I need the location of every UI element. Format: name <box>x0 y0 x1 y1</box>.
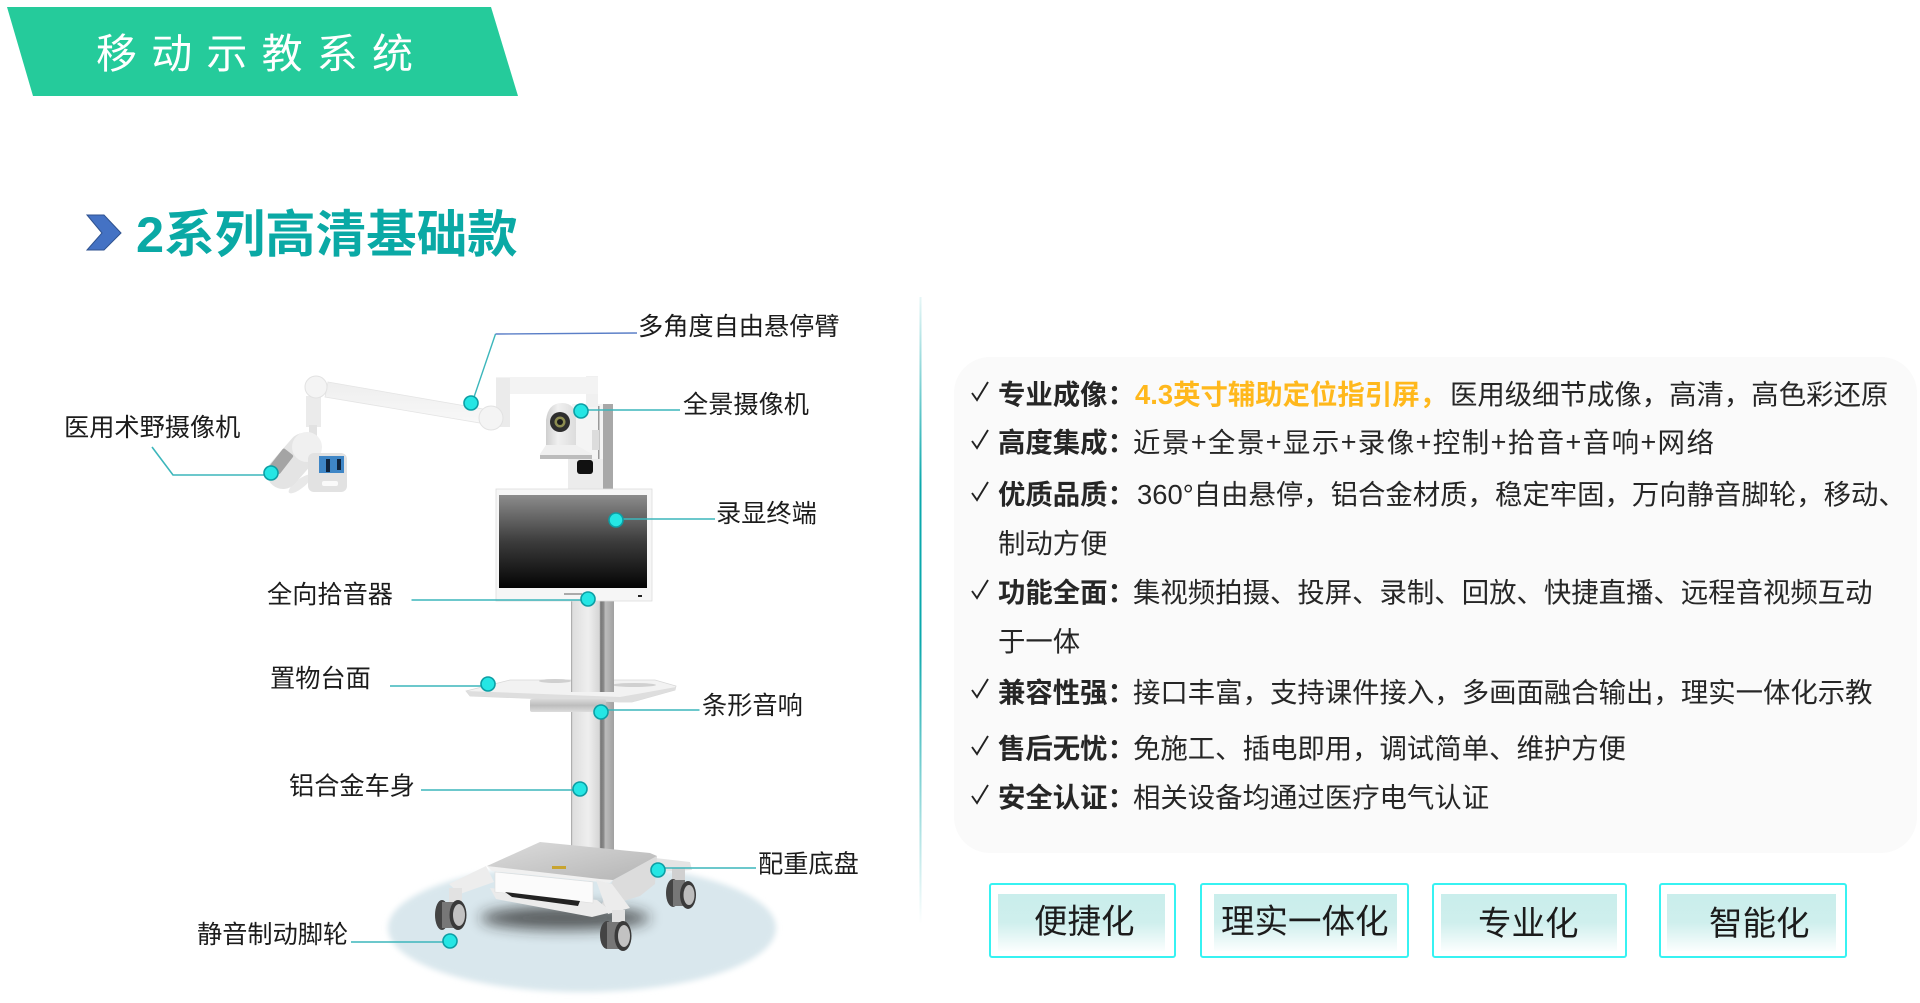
callout: 多角度自由悬停臂: 多角度自由悬停臂 <box>638 307 840 343</box>
feature: 优质品质: 制动方便 <box>998 521 1108 561</box>
feature: 专业成像 <box>972 372 1888 412</box>
button: 专业化: 专业化 <box>1478 896 1578 945</box>
callout: 全向拾音器: 全向拾音器 <box>267 575 393 611</box>
button: 专业化 <box>1433 884 1626 957</box>
feature: 优质品质 <box>972 472 1906 561</box>
feature: 安全认证: 安全认证： <box>998 775 1135 815</box>
feature: 高度集成: 高度集成： <box>998 420 1135 460</box>
button: 理实一体化 <box>1201 884 1408 957</box>
callout: 多角度自由悬停臂 <box>464 307 840 410</box>
feature: 优质品质: 优质品质： <box>998 472 1135 512</box>
pole <box>571 600 614 855</box>
feature: 售后无忧: 免施工、插电即用，调试简单、维护方便 <box>1133 726 1626 766</box>
feature: 兼容性强: 兼容性强： <box>998 670 1135 710</box>
arm <box>305 376 598 437</box>
pole front of shelf <box>571 600 614 692</box>
feature: 兼容性强: 接口丰富，支持课件接入，多画面融合输出，理实一体化示教 <box>1133 670 1873 710</box>
feature: 安全认证: 相关设备均通过医疗电气认证 <box>1133 775 1489 815</box>
feature: 售后无忧: 售后无忧： <box>998 726 1135 766</box>
button: 理实一体化: 理实一体化 <box>1221 894 1388 943</box>
base side <box>600 856 657 908</box>
feature: 专业成像: 专业成像： <box>998 372 1135 412</box>
feature: 功能全面: 功能全面： <box>998 570 1135 610</box>
surgical field camera <box>269 432 347 496</box>
product: mobile teaching cart <box>269 376 776 992</box>
callout: 条形音响: 条形音响 <box>702 686 803 722</box>
button: 智能化 <box>1660 884 1846 957</box>
title banner: 移动示教系统: 移动示教系统 <box>96 20 427 80</box>
callout: 全景摄像机: 全景摄像机 <box>683 385 809 421</box>
feature: 功能全面 <box>972 570 1873 659</box>
base plate <box>487 842 657 881</box>
base skirt <box>490 888 612 917</box>
feature: 功能全面: 于一体 <box>998 619 1080 659</box>
callout: 医用术野摄像机: 医用术野摄像机 <box>64 408 240 444</box>
floor disc <box>388 864 776 992</box>
base slot <box>505 892 580 906</box>
callout: 全向拾音器 <box>267 575 595 611</box>
button: 便捷化: 便捷化 <box>1034 894 1134 943</box>
back right leg and wheel <box>655 858 696 909</box>
panel: feature list <box>954 357 1917 853</box>
callout: 铝合金车身: 铝合金车身 <box>289 766 415 802</box>
callout: 录显终端 <box>609 494 817 530</box>
callout: 静音制动脚轮: 静音制动脚轮 <box>197 915 348 951</box>
monitor <box>496 489 652 601</box>
callout: 铝合金车身 <box>289 766 587 802</box>
button: 便捷化 <box>990 884 1175 957</box>
callout: 静音制动脚轮 <box>197 915 457 951</box>
feature: 高度集成: 近景+全景+显示+录像+控制+拾音+音响+网络 <box>1133 420 1714 460</box>
shelf <box>466 679 676 702</box>
divider line <box>920 297 922 924</box>
callout: 医用术野摄像机 <box>64 408 278 480</box>
callout: 全景摄像机 <box>574 385 809 421</box>
feature: 安全认证 <box>972 775 1489 815</box>
cart shadow <box>480 906 650 930</box>
front right leg and wheel <box>596 880 632 951</box>
base front <box>495 872 593 903</box>
callout: 录显终端: 录显终端 <box>716 494 817 530</box>
panoramic camera <box>540 403 592 459</box>
title banner: 移动示教系统 <box>7 7 518 96</box>
button: 智能化: 智能化 <box>1709 896 1810 945</box>
feature: 功能全面: 集视频拍摄、投屏、录制、回放、快捷直播、远程音视频互动 <box>1133 570 1873 610</box>
front left leg and wheel <box>435 866 494 930</box>
feature: 优质品质: 360°自由悬停，铝合金材质，稳定牢固，万向静音脚轮，移动、 <box>1137 479 1906 510</box>
feature: 专业成像: 医用级细节成像，高清，高色彩还原 <box>1450 372 1888 412</box>
callout: 置物台面: 置物台面 <box>270 659 371 695</box>
feature: 专业成像: 4.3英寸辅助定位指引屏， <box>1135 379 1447 410</box>
upper camera mount <box>568 376 613 490</box>
callout: 配重底盘: 配重底盘 <box>758 844 859 880</box>
callout: 条形音响 <box>594 686 803 722</box>
callout: 置物台面 <box>270 659 495 695</box>
heading: 2系列高清基础款: 2系列高清基础款 <box>136 206 518 263</box>
callout: 配重底盘 <box>651 844 859 880</box>
soundbar <box>530 699 606 712</box>
